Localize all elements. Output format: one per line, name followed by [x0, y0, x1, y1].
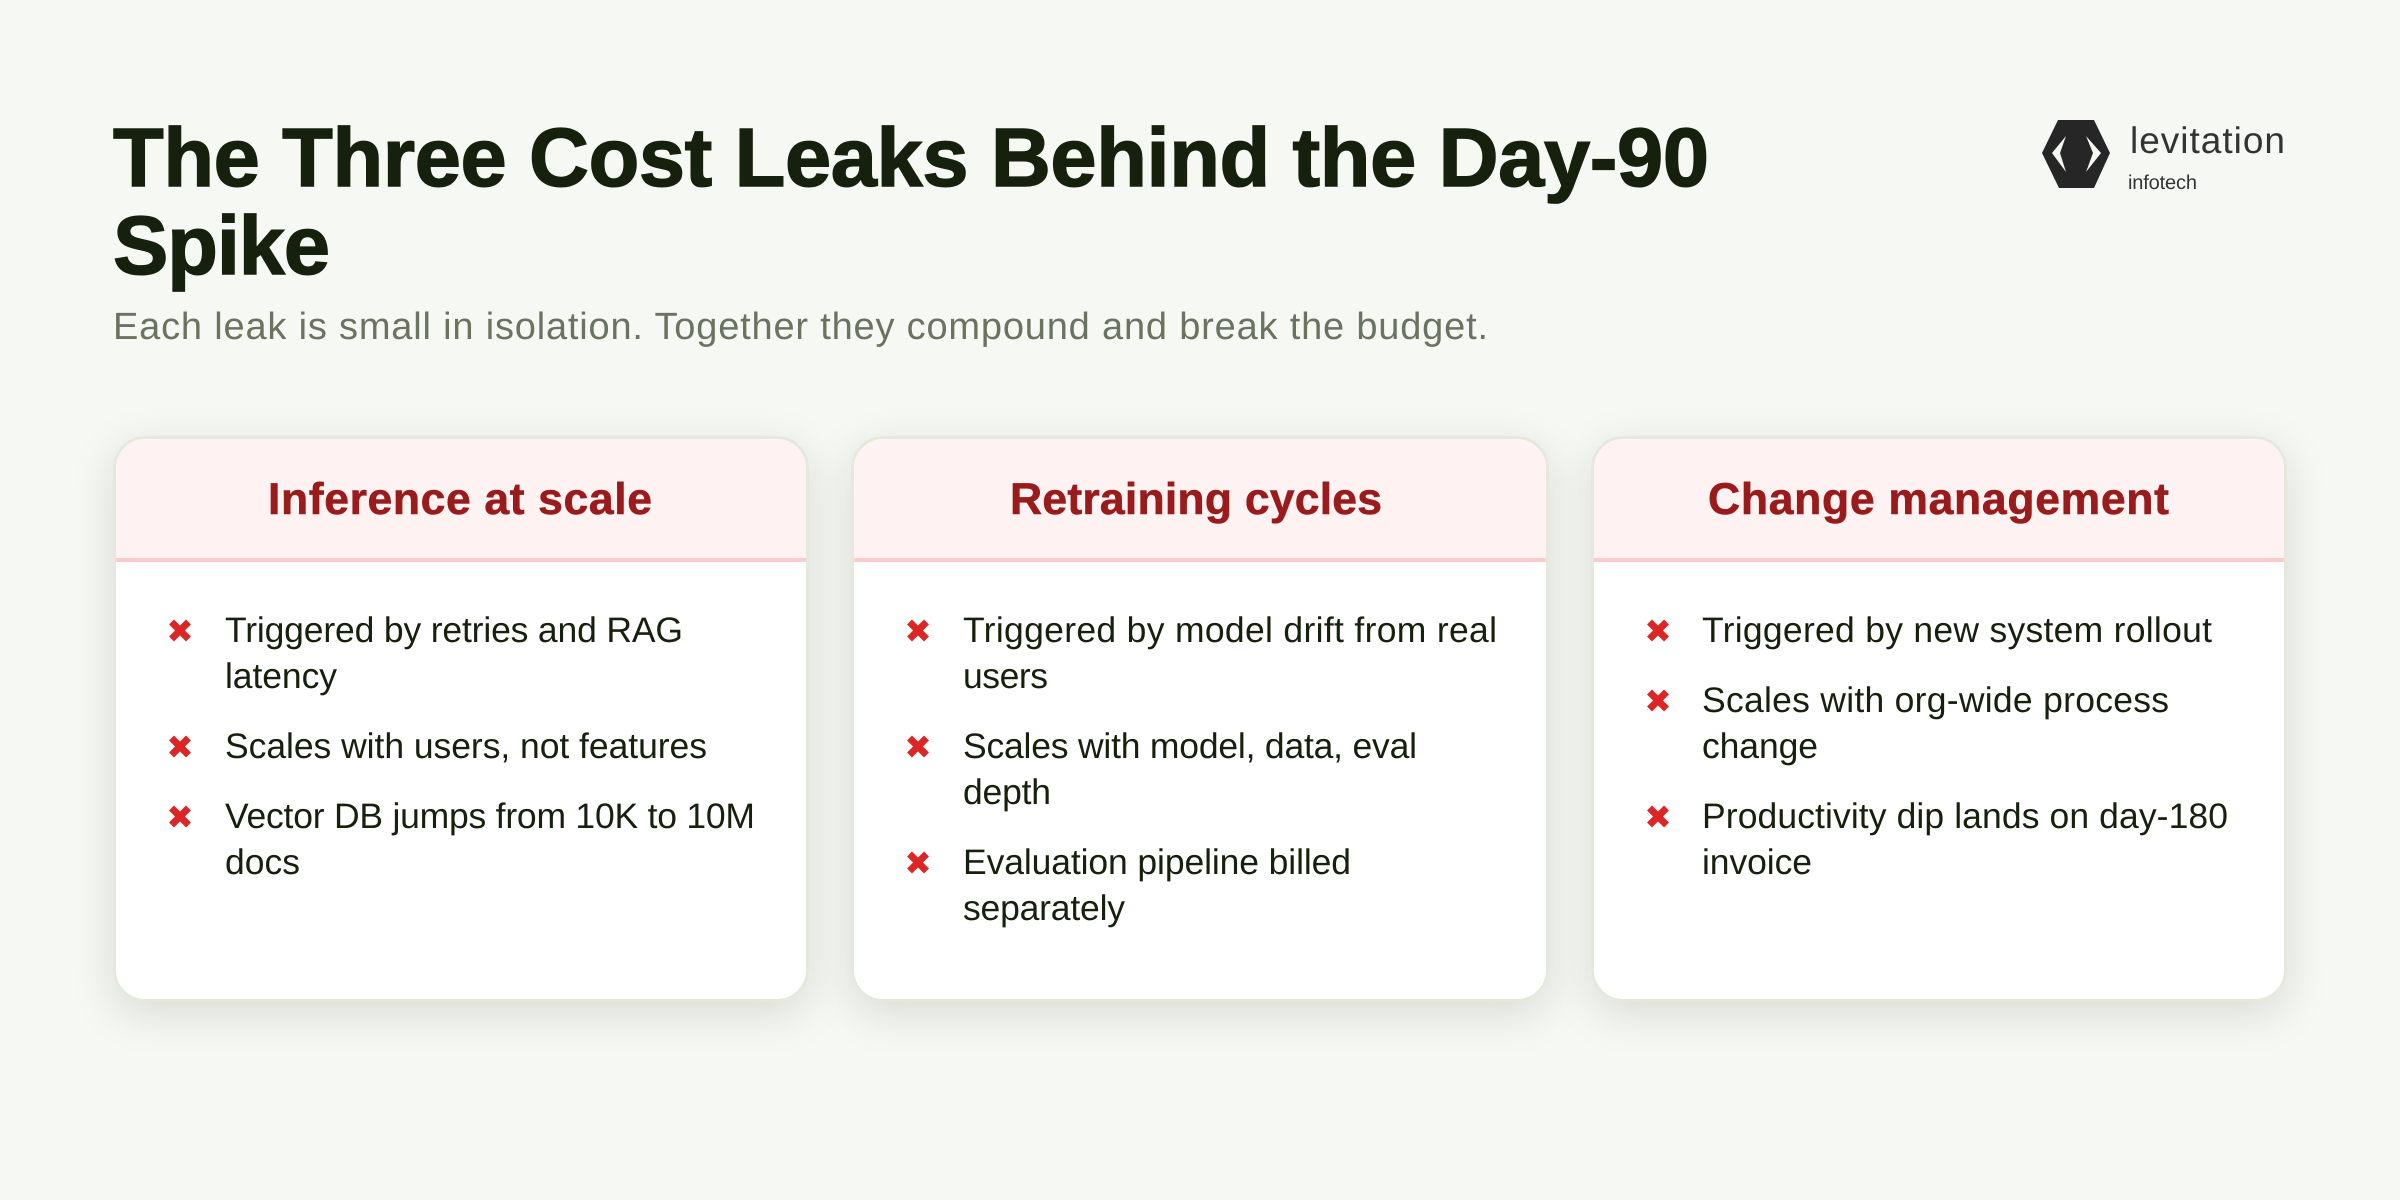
card heading: Retraining cycles — [1010, 475, 1382, 524]
bullet 1: Triggered by model drift from real — [963, 610, 1497, 650]
bullet 3 — [910, 842, 1351, 928]
bullet 3 — [172, 796, 755, 882]
icon: hexagon with chevrons — [2042, 120, 2110, 188]
bullet 3: Evaluation pipeline billed — [963, 842, 1351, 882]
card header band — [854, 439, 1546, 558]
bullet 3: docs — [225, 842, 300, 882]
card background — [1592, 438, 2286, 1000]
panel: retraining cycles — [852, 438, 1548, 1000]
bullet 1 — [172, 610, 683, 696]
bullet 2: change — [1702, 726, 1818, 766]
card header band — [116, 439, 806, 558]
logo wordmark: levitation — [2130, 120, 2285, 161]
card background — [852, 438, 1548, 1000]
panel: inference at scale — [114, 438, 808, 1000]
logo: levitation infotech — [2042, 120, 2285, 194]
bullet 2: Scales with model, data, eval — [963, 726, 1417, 766]
bullet 3: Vector DB jumps from 10K to 10M — [225, 796, 755, 836]
bullet 2: Scales with users, not features — [225, 726, 707, 766]
bullet 1: Triggered by retries and RAG — [225, 610, 683, 650]
title: The Three Cost Leaks Behind the Day-90 — [113, 111, 1709, 204]
bullet 1: latency — [225, 656, 337, 696]
bullet 1: Triggered by new system rollout — [1702, 610, 2212, 650]
card background — [114, 438, 808, 1000]
logo sub-wordmark: infotech — [2128, 172, 2197, 194]
card heading: Inference at scale — [268, 475, 652, 524]
card header band — [1594, 439, 2284, 558]
panel: change management — [1592, 438, 2286, 1000]
bullet 1: users — [963, 656, 1048, 696]
title: Spike — [113, 199, 330, 292]
bullet 3: separately — [963, 888, 1125, 928]
bullet 2: Scales with org-wide process — [1702, 680, 2169, 720]
card heading: Change management — [1708, 475, 2169, 524]
bullet 3 — [1650, 796, 2228, 882]
bullet 3: invoice — [1702, 842, 1812, 882]
bullet 3: Productivity dip lands on day-180 — [1702, 796, 2228, 836]
bullet 2 — [910, 726, 1417, 812]
bullet 1 — [910, 610, 1497, 696]
bullet 2 — [1650, 680, 2169, 766]
subtitle: Each leak is small in isolation. Together they compound and break the budget. — [113, 306, 1488, 348]
bullet 2: depth — [963, 772, 1051, 812]
